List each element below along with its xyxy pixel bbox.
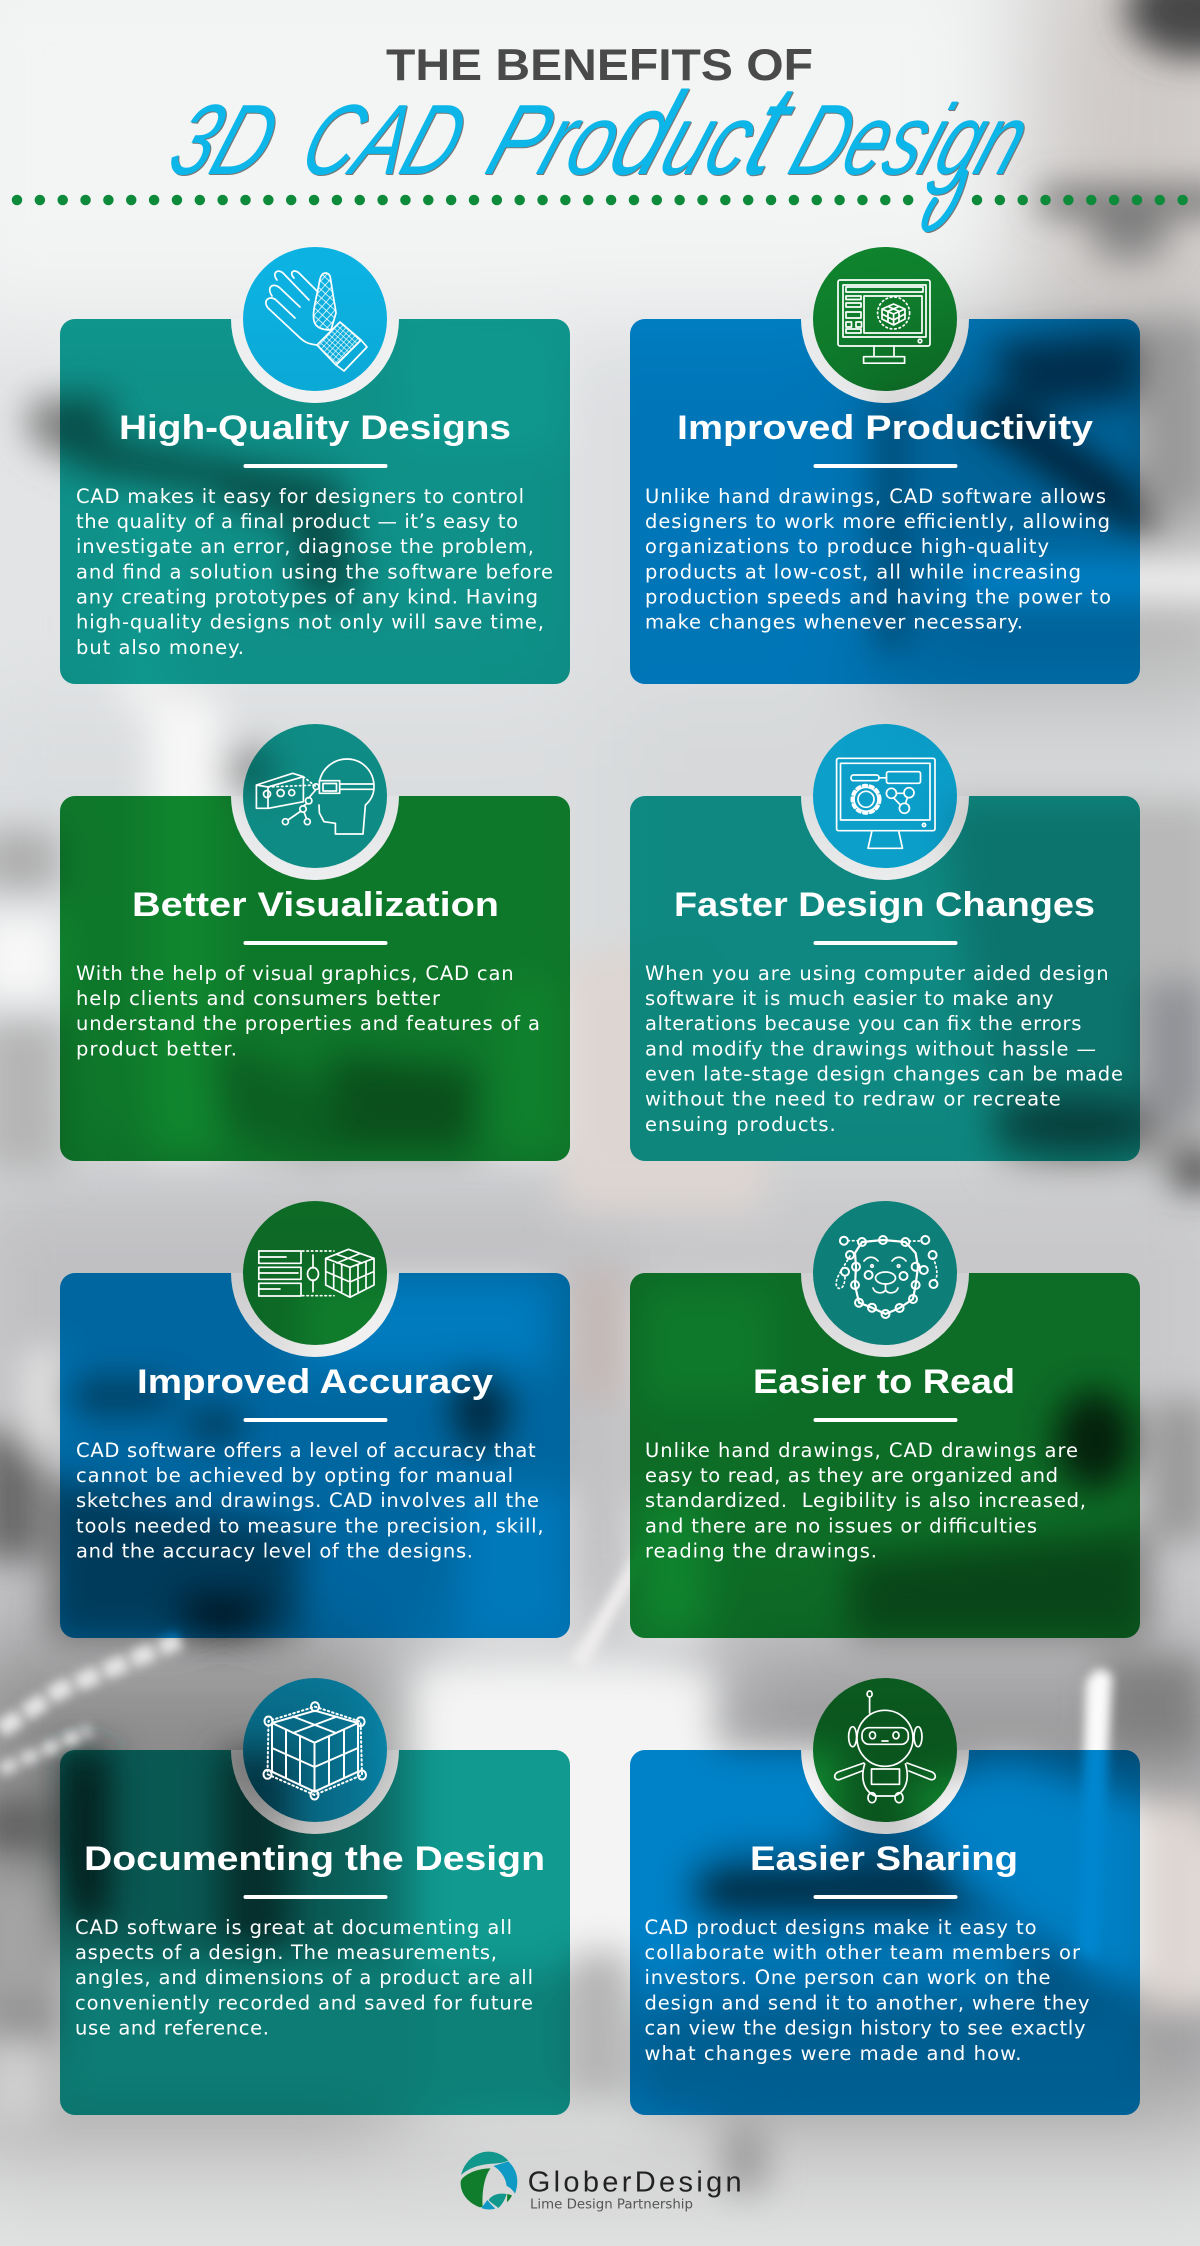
icon: dog face with landmark nodes xyxy=(836,1236,938,1318)
title: 3D CAD Product Design: CAD xyxy=(288,84,481,195)
title: 3D CAD Product Design: 3D xyxy=(156,84,293,195)
title rule xyxy=(814,1418,958,1422)
body text: CAD makes it easy for designers to control xyxy=(76,485,524,508)
body text xyxy=(75,1916,533,2040)
card background xyxy=(60,1273,570,1638)
icon circle xyxy=(243,1678,387,1822)
body text xyxy=(645,1439,1086,1562)
card title: Faster Design Changes xyxy=(674,886,1095,924)
icon: monitor with cube xyxy=(838,280,930,363)
body text: design and send it to another, where they xyxy=(644,1992,1090,2014)
icon ring xyxy=(231,1273,399,1357)
body text xyxy=(645,962,1123,1136)
body text xyxy=(76,485,553,659)
body text: what changes were made and how. xyxy=(644,2042,1022,2065)
card title: Easier Sharing xyxy=(750,1840,1018,1878)
logo: GloberDesign xyxy=(461,2152,742,2212)
body text: production speeds and having the power to xyxy=(645,586,1111,608)
icon: wireframe cube with handles xyxy=(264,1702,366,1800)
body text: any creating prototypes of any kind. Having xyxy=(76,586,538,608)
body text: product better. xyxy=(76,1038,237,1060)
title rule xyxy=(244,1418,388,1422)
body text: can view the design history to see exactly xyxy=(644,2016,1086,2040)
icon circle xyxy=(243,1201,387,1345)
body text: tools needed to measure the precision, skill, xyxy=(76,1514,544,1538)
body text: cannot be achieved by opting for manual xyxy=(76,1464,513,1487)
icon ring xyxy=(801,1750,969,1834)
body text: CAD software is great at documenting all xyxy=(75,1916,512,1939)
body text: and the accuracy level of the designs. xyxy=(76,1540,473,1562)
icon: robot xyxy=(835,1691,935,1803)
body text: easy to read, as they are organized and xyxy=(645,1464,1058,1487)
body text xyxy=(76,1439,544,1562)
body text xyxy=(644,1916,1090,2065)
title rule xyxy=(244,464,388,468)
body text: use and reference. xyxy=(75,2016,269,2040)
body text: software it is much easier to make any xyxy=(645,987,1054,1010)
card background xyxy=(630,1750,1140,2115)
body text: alterations because you can fix the errors xyxy=(645,1012,1081,1035)
body text: When you are using computer aided design xyxy=(645,962,1109,985)
panel: Easier Sharing xyxy=(630,1678,1140,2115)
icon ring xyxy=(231,1750,399,1834)
body text: standardized. Legibility is also increased, xyxy=(645,1489,1086,1512)
body text: make changes whenever necessary. xyxy=(645,610,1023,634)
card title: Better Visualization xyxy=(132,886,499,924)
card title: Improved Productivity xyxy=(677,409,1093,447)
title: 3D CAD Product Design: Product xyxy=(472,59,813,202)
body text: CAD product designs make it easy to xyxy=(644,1916,1036,1939)
panel: Better Visualization xyxy=(60,724,570,1161)
title: 3D CAD Product Design: Design xyxy=(777,84,1044,195)
body text: CAD software offers a level of accuracy that xyxy=(76,1439,536,1462)
dotted divider xyxy=(17,195,1183,205)
body text: and find a solution using the software before xyxy=(76,560,553,584)
title rule xyxy=(244,1895,388,1899)
body text: sketches and drawings. CAD involves all the xyxy=(76,1489,539,1512)
body text: the quality of a final product — it’s easy to xyxy=(76,510,518,533)
body text: investigate an error, diagnose the problem, xyxy=(76,535,534,558)
icon circle xyxy=(243,247,387,391)
body text: help clients and consumers better xyxy=(76,987,441,1010)
panel: Improved Productivity xyxy=(630,247,1140,684)
icon: hand with wireframe mesh xyxy=(266,271,367,371)
panel: Faster Design Changes xyxy=(630,724,1140,1161)
body text: and modify the drawings without hassle — xyxy=(645,1038,1096,1060)
body text: and there are no issues or difficulties xyxy=(645,1514,1037,1538)
title rule xyxy=(814,464,958,468)
body text: even late-stage design changes can be made xyxy=(645,1062,1123,1086)
title rule xyxy=(244,941,388,945)
card background xyxy=(60,1750,570,2115)
icon: monitor with gear and tools xyxy=(837,758,935,848)
icon ring xyxy=(801,319,969,403)
card title: Improved Accuracy xyxy=(137,1363,493,1401)
body text: designers to work more efficiently, allowing xyxy=(645,510,1110,533)
icon circle xyxy=(813,247,957,391)
body text: understand the properties and features of a xyxy=(76,1012,540,1035)
icon: panels with wireframe cube xyxy=(259,1249,374,1297)
card background xyxy=(630,796,1140,1161)
card title: High-Quality Designs xyxy=(119,409,511,447)
icon ring xyxy=(231,796,399,880)
body text: organizations to produce high-quality xyxy=(645,535,1049,558)
panel: High-Quality Designs xyxy=(60,247,570,684)
body text: ensuing products. xyxy=(645,1113,836,1136)
body text: reading the drawings. xyxy=(645,1540,877,1562)
body text: Unlike hand drawings, CAD software allows xyxy=(645,485,1106,508)
body text: Unlike hand drawings, CAD drawings are xyxy=(645,1439,1078,1462)
card title: Documenting the Design xyxy=(84,1840,545,1878)
card title: Easier to Read xyxy=(753,1363,1015,1401)
body text: conveniently recorded and saved for future xyxy=(75,1992,533,2014)
body text: products at low-cost, all while increasing xyxy=(645,560,1081,584)
icon ring xyxy=(801,1273,969,1357)
title rule xyxy=(814,1895,958,1899)
company name: GloberDesign xyxy=(528,2167,742,2199)
icon circle xyxy=(813,1678,957,1822)
icon ring xyxy=(801,796,969,880)
title rule xyxy=(814,941,958,945)
heading: The Benefits of: THE BENEFITS OF xyxy=(386,41,813,90)
card background xyxy=(60,319,570,684)
panel: Improved Accuracy xyxy=(60,1201,570,1638)
icon circle xyxy=(813,1201,957,1345)
body text: angles, and dimensions of a product are all xyxy=(75,1966,533,1989)
body text xyxy=(76,962,540,1060)
icon circle xyxy=(813,724,957,868)
card background xyxy=(630,319,1140,684)
body text: high-quality designs not only will save time, xyxy=(76,610,544,634)
body text: aspects of a design. The measurements, xyxy=(75,1941,497,1964)
title: 3D CAD Product Design xyxy=(156,59,1044,229)
body text xyxy=(645,485,1111,634)
tagline: Lime Design Partnership xyxy=(530,2196,693,2212)
body text: With the help of visual graphics, CAD can xyxy=(76,962,514,985)
card background xyxy=(630,1273,1140,1638)
icon: head with visor and box xyxy=(256,759,374,834)
body text: investors. One person can work on the xyxy=(644,1966,1050,1989)
icon: globe mark xyxy=(461,2152,517,2209)
body text: but also money. xyxy=(76,636,244,659)
body text: without the need to redraw or recreate xyxy=(645,1088,1061,1110)
card background xyxy=(60,796,570,1161)
icon ring xyxy=(231,319,399,403)
panel: Documenting the Design xyxy=(60,1678,570,2115)
panel: Easier to Read xyxy=(630,1201,1140,1638)
icon circle xyxy=(243,724,387,868)
body text: collaborate with other team members or xyxy=(644,1941,1081,1964)
